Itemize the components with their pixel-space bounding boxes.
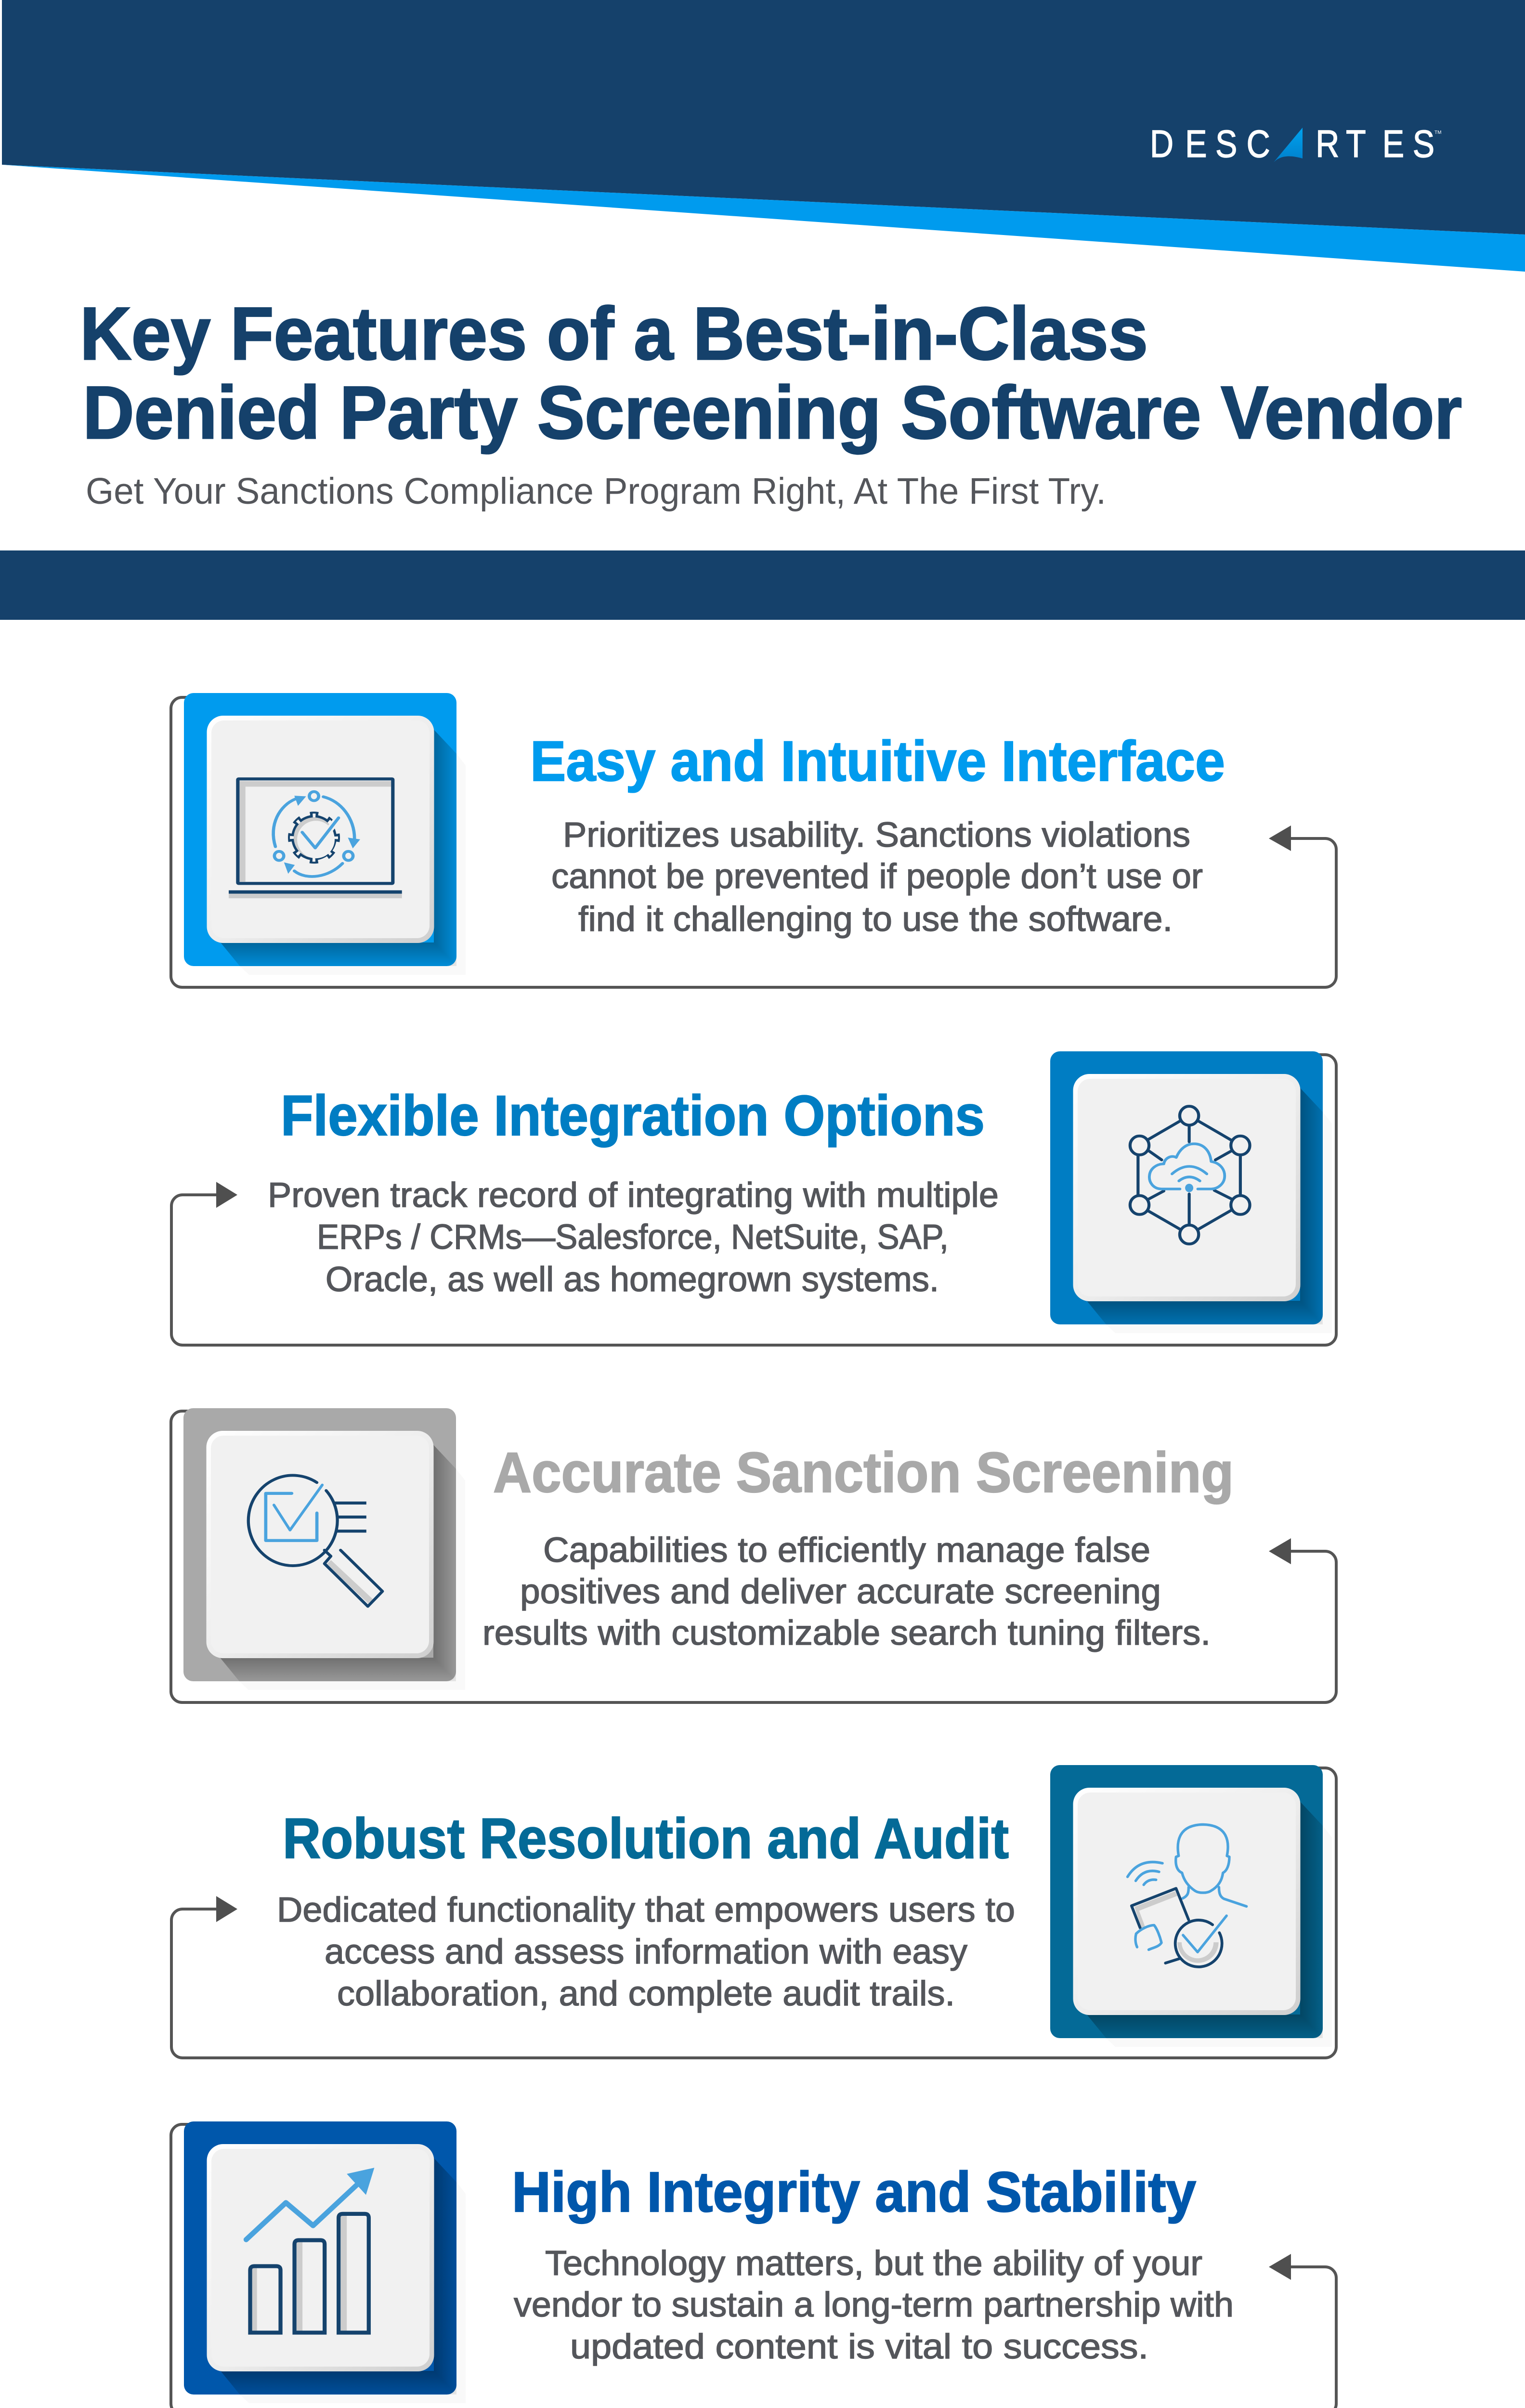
body text (514, 2244, 1234, 2366)
body text: access and assess information with easy (325, 1933, 967, 1971)
icon: person with tablet (1128, 1824, 1247, 1967)
tile 3 (183, 1408, 465, 1690)
outline arrow 1 (171, 697, 1336, 987)
tile 4 (1050, 1765, 1332, 2047)
body text: updated content is vital to success. (570, 2328, 1148, 2366)
icon: rising bar chart (246, 2168, 374, 2333)
body text: find it challenging to use the software. (578, 900, 1173, 939)
title: Denied Party Screening Software Vendor (83, 371, 1462, 454)
panel: Easy and Intuitive Interface (171, 693, 1336, 987)
title: Key Features of a Best-in-Class (80, 292, 1148, 375)
heading: Accurate Sanction Screening (493, 1441, 1234, 1505)
title (80, 292, 1462, 454)
heading: Robust Resolution and Audit (283, 1807, 1009, 1871)
body text (268, 1176, 999, 1299)
body text (277, 1891, 1015, 2013)
outline arrow 2 (171, 1055, 1336, 1345)
heading: Flexible Integration Options (281, 1084, 985, 1148)
tile 1 (184, 693, 466, 975)
panel: Accurate Sanction Screening (171, 1408, 1336, 1702)
body text: Dedicated functionality that empowers users to (277, 1891, 1015, 1929)
tile 5 (184, 2121, 466, 2403)
tile 2 (1050, 1051, 1332, 1333)
logo: Descartes: DESCRTES (1150, 122, 1434, 165)
heading: High Integrity and Stability (512, 2160, 1196, 2224)
panel: High Integrity and Stability (171, 2121, 1336, 2408)
body text: Technology matters, but the ability of your (545, 2244, 1202, 2283)
body text: Oracle, as well as homegrown systems. (326, 1260, 939, 1299)
body text: Prioritizes usability. Sanctions violations (563, 816, 1190, 854)
body text (551, 816, 1203, 939)
divider band (0, 550, 1525, 620)
heading: Easy and Intuitive Interface (530, 730, 1225, 793)
body text: results with customizable search tuning filters. (482, 1614, 1211, 1652)
panel: Robust Resolution and Audit (171, 1765, 1336, 2058)
icon: laptop with gear (229, 779, 402, 898)
body text: Proven track record of integrating with multiple (268, 1176, 999, 1215)
logo: Descartes: TM (1434, 130, 1441, 135)
icon: magnifier with checkbox (248, 1475, 382, 1606)
outline arrow 3 (171, 1411, 1336, 1702)
outline arrow 4 (171, 1768, 1336, 2058)
icon: cloud network (1130, 1106, 1250, 1244)
body text: cannot be prevented if people don’t use or (551, 857, 1203, 896)
body text: ERPs / CRMs—Salesforce, NetSuite, SAP, (317, 1218, 949, 1256)
header banner (2, 0, 1525, 272)
body text: positives and deliver accurate screening (520, 1572, 1161, 1611)
body text: vendor to sustain a long-term partnership with (514, 2286, 1234, 2324)
body text: collaboration, and complete audit trails. (337, 1975, 955, 2013)
panel: Flexible Integration Options (171, 1051, 1336, 1345)
subtitle: Get Your Sanctions Compliance Program Right, At The First Try. (86, 471, 1106, 512)
body text (482, 1531, 1211, 1652)
outline arrow 5 (171, 2124, 1336, 2408)
body text: Capabilities to efficiently manage false (543, 1531, 1150, 1570)
